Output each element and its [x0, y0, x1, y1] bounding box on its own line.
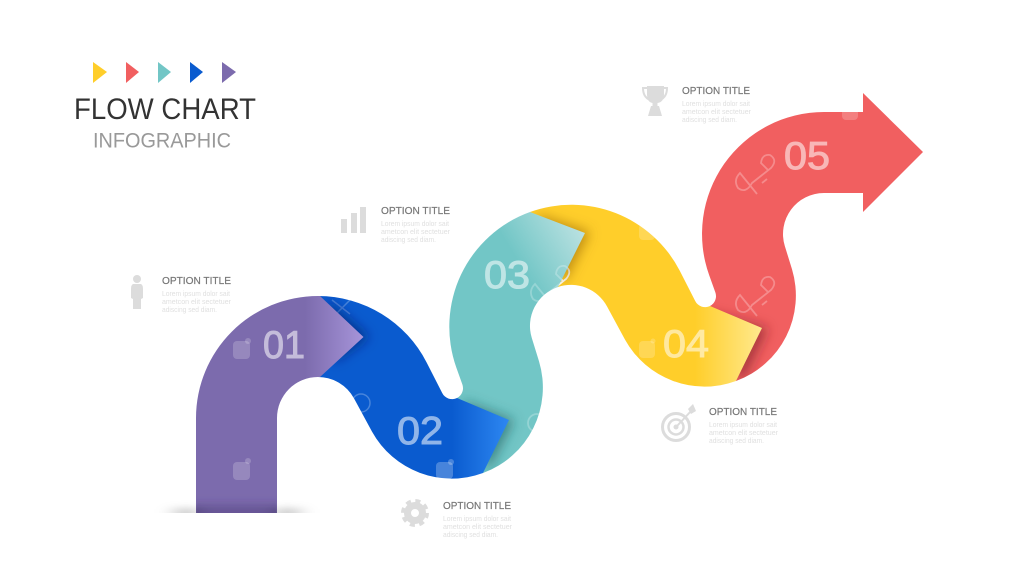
segment 02: blue band	[318, 296, 509, 479]
icon: target	[662, 404, 696, 440]
option 4: target: adiscing sed diam.	[709, 436, 764, 445]
option 3: bars: adiscing sed diam.	[381, 235, 436, 244]
option 4: target: ametcon elit sectetuer	[709, 428, 778, 437]
option 5: trophy: Lorem ipsum dolor sait	[682, 99, 751, 108]
segment 02: blue band: 02	[397, 410, 443, 453]
option 5: trophy: OPTION TITLE	[682, 85, 750, 97]
option 4: target: OPTION TITLE	[709, 406, 777, 418]
option 1: person	[131, 275, 231, 314]
option 4: target: Lorem ipsum dolor sait	[709, 420, 778, 429]
option 1: person: OPTION TITLE	[162, 275, 231, 287]
shadow of blue tip on teal	[462, 400, 514, 472]
segment 03: teal band: 03	[484, 254, 530, 297]
segment 04: yellow band: 04	[663, 323, 709, 366]
icon: gear	[403, 501, 427, 525]
option 2: gear: ametcon elit sectetuer	[443, 522, 512, 531]
segment 01: purple band	[196, 296, 364, 518]
option 3: bars: Lorem ipsum dolor sait	[381, 219, 450, 228]
option 1: person: ametcon elit sectetuer	[162, 297, 231, 306]
option 2: gear: OPTION TITLE	[443, 500, 511, 512]
option 3: bars: ametcon elit sectetuer	[381, 227, 450, 236]
header triangles	[93, 62, 236, 83]
segment 01: purple band: 01	[263, 324, 305, 367]
option 5: trophy: adiscing sed diam.	[682, 115, 737, 124]
option 5: trophy	[643, 85, 751, 124]
option 2: gear: Lorem ipsum dolor sait	[443, 514, 512, 523]
shadow of yellow tip on red	[706, 312, 768, 384]
option 4: target	[662, 404, 778, 445]
title: FLOW CHART	[74, 93, 256, 126]
option 2: gear: adiscing sed diam.	[443, 530, 498, 539]
segment 05: red arrow	[702, 93, 923, 381]
option 1: person: adiscing sed diam.	[162, 305, 217, 314]
option 5: trophy: ametcon elit sectetuer	[682, 107, 751, 116]
subtitle: INFOGRAPHIC	[93, 130, 231, 152]
infographic canvas	[76, 62, 923, 538]
option 1: person: Lorem ipsum dolor sait	[162, 289, 231, 298]
option 3: bars: OPTION TITLE	[381, 205, 450, 217]
segment 03: teal band	[449, 212, 585, 473]
segment 05: red arrow: 05	[784, 135, 830, 178]
option 2: gear	[403, 500, 512, 539]
shadow of purple tip on blue	[326, 300, 369, 362]
icon: bar chart	[341, 207, 366, 233]
shadow of teal tip on yellow	[536, 214, 590, 284]
segment 04: yellow band	[530, 205, 762, 387]
icon: person	[131, 275, 143, 309]
ground shadow under purple band	[176, 509, 298, 517]
option 3: bars	[341, 205, 450, 244]
icon: trophy	[643, 86, 667, 116]
